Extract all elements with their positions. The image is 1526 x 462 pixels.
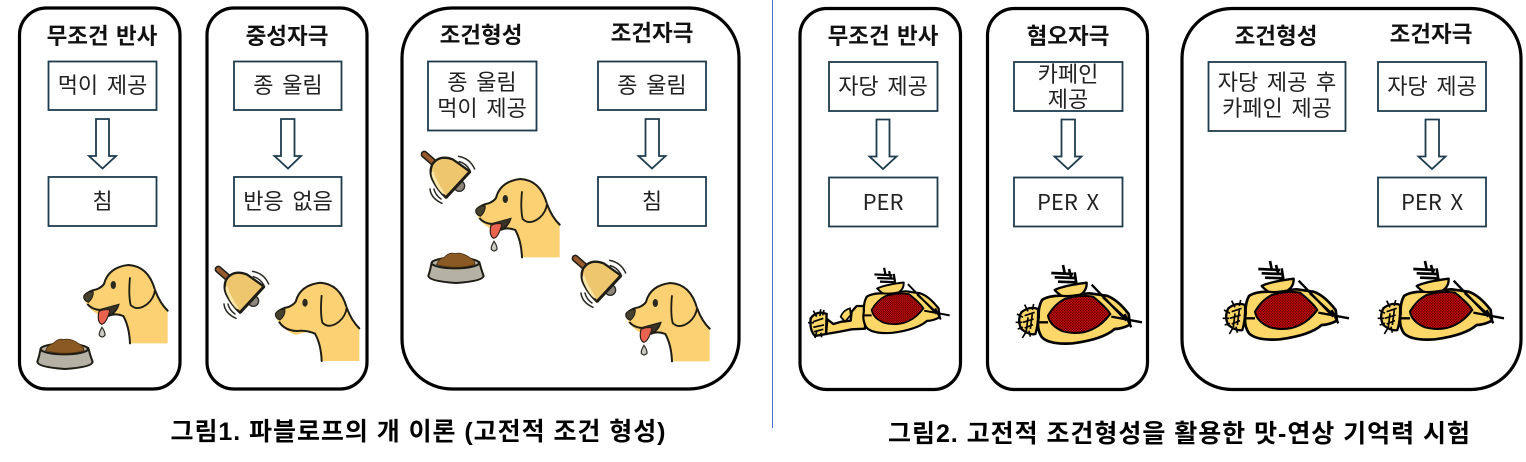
icon: fly — [1016, 265, 1142, 344]
heading: neutral stimulus: 중성자극 — [246, 24, 328, 49]
heading: conditioning: 조건형성 — [1235, 24, 1317, 49]
icon: bell during conditioning — [424, 154, 475, 203]
arrow — [638, 119, 666, 168]
icon: salivating dog after conditioning — [626, 283, 710, 361]
icon: fly with extended proboscis — [808, 268, 950, 338]
caption: figure 1: 그림1. 파블로프의 개 이론 (고전적 조건 형성) — [170, 418, 666, 446]
heading: conditioning: 조건형성 — [440, 23, 522, 48]
response box: no response: 반응 없음 — [243, 184, 333, 216]
panel: unconditioned reflex — [20, 8, 180, 389]
panel: conditioning — [402, 8, 739, 389]
arrow — [870, 120, 896, 169]
icon: bell after conditioning — [575, 258, 626, 307]
stimulus box: food: 먹이 제공 — [58, 68, 147, 100]
stimulus box: sugar — [1378, 62, 1486, 111]
stimulus box: bell: 종 울림 — [617, 68, 687, 100]
response box: PER — [829, 178, 938, 226]
stimulus box: bell: 종 울림 — [253, 68, 323, 100]
stimulus box: food — [48, 62, 156, 110]
stimulus box: caffeine: 제공 — [1048, 82, 1088, 114]
heading: aversive stimulus: 혐오자극 — [1027, 24, 1109, 49]
heading: conditioned stimulus: 조건자극 — [611, 21, 693, 46]
stimulus box: sugar then caffeine — [1208, 62, 1346, 131]
panel: conditioning (fly) — [1182, 8, 1521, 390]
arrow — [1418, 120, 1446, 169]
heading: unconditioned reflex: 무조건 반사 — [47, 24, 158, 49]
panel: unconditioned reflex (fly) — [800, 8, 960, 390]
arrow — [89, 119, 116, 168]
stimulus box: sugar — [829, 62, 938, 111]
figure 2: taste memory test — [800, 8, 1521, 448]
panel: neutral stimulus — [207, 8, 367, 389]
response box: no PER: PER X — [1401, 185, 1463, 217]
stimulus box: bell — [598, 62, 706, 110]
icon: salivating dog — [84, 265, 168, 343]
icon: fly during conditioning — [1223, 261, 1349, 340]
stimulus box: bell and food: 먹이 제공 — [437, 91, 527, 123]
arrow — [274, 119, 301, 168]
response box: no PER: PER X — [1037, 185, 1099, 217]
arrow — [1054, 120, 1082, 169]
stimulus box: bell and food — [428, 62, 536, 130]
icon: salivating dog during conditioning — [476, 179, 560, 257]
stimulus box: sugar then caffeine: 자당 제공 후 — [1218, 65, 1336, 97]
stimulus box: caffeine — [1014, 57, 1122, 114]
stimulus box: sugar: 자당 제공 — [838, 69, 928, 101]
response box: saliva: 침 — [92, 184, 113, 216]
response box: no response — [234, 177, 342, 226]
heading: unconditioned reflex: 무조건 반사 — [828, 24, 939, 49]
stimulus box: sugar: 자당 제공 — [1387, 69, 1477, 101]
icon: food bowl — [37, 339, 93, 369]
stimulus box: caffeine: 카페인 — [1038, 57, 1098, 89]
response box: PER: PER — [863, 185, 903, 217]
icon: bell — [218, 269, 269, 318]
stimulus box: sugar then caffeine: 카페인 제공 — [1222, 91, 1332, 123]
response box: saliva — [48, 177, 156, 226]
icon: dog — [275, 283, 359, 361]
divider between figures — [772, 0, 774, 428]
response box: saliva: 침 — [642, 184, 662, 216]
caption: figure 2: 그림2. 고전적 조건형성을 활용한 맛-연상 기억력 시험 — [888, 420, 1470, 448]
heading: conditioned stimulus: 조건자극 — [1390, 22, 1472, 47]
icon: food bowl — [428, 253, 484, 283]
figure 1: Pavlov's dog theory — [20, 8, 739, 446]
response box: no PER — [1014, 178, 1122, 226]
icon: fly after conditioning — [1378, 261, 1504, 340]
stimulus box: bell — [234, 62, 342, 110]
response box: no PER — [1378, 178, 1486, 226]
panel: aversive stimulus — [988, 8, 1148, 390]
response box: saliva — [598, 177, 706, 226]
stimulus box: bell and food: 종 울림 — [447, 65, 517, 97]
